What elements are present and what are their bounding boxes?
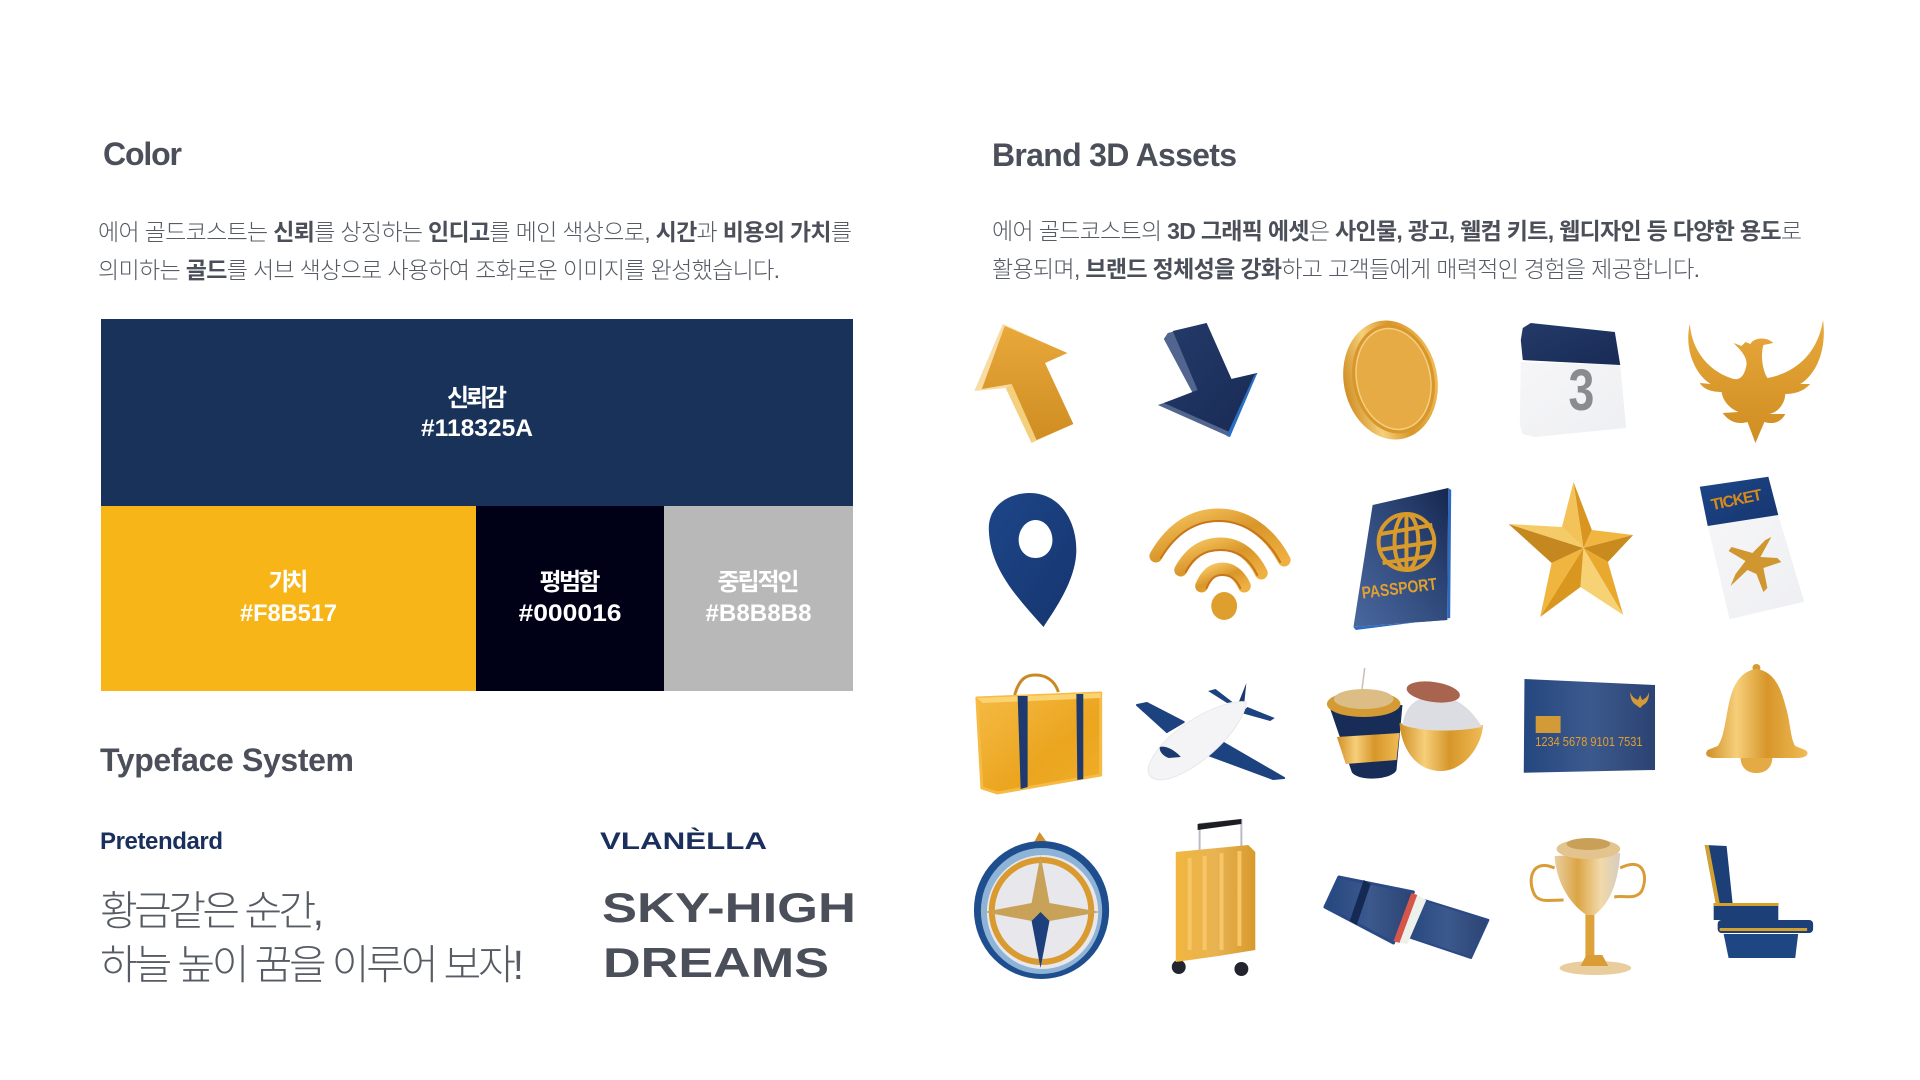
icon: passport — [1353, 488, 1451, 630]
icon: drink and food bowl — [1327, 668, 1483, 779]
swatch: black — [476, 506, 664, 691]
korean sample text: 황금같은 순간, — [100, 888, 324, 934]
swatch: gold — [101, 506, 476, 691]
assets description text — [992, 218, 1802, 282]
english sample text — [602, 884, 856, 986]
typeface label: pretendard: Pretendard — [100, 828, 223, 855]
icon: seat belt — [1325, 877, 1488, 958]
icon: credit card: 1234 5678 9101 7531 — [1535, 734, 1643, 749]
icon: calendar: 3 — [1569, 359, 1594, 423]
icon: airplane seat — [1705, 845, 1813, 958]
icon: wifi — [1156, 515, 1284, 620]
swatch: navy — [101, 319, 853, 506]
icon: compass — [974, 832, 1109, 979]
swatch: navy: #118325A — [421, 415, 533, 442]
color description text: 에어 골드코스트는 신뢰를 상징하는 인디고를 메인 색상으로, 시간과 비용의 가치를 — [98, 219, 852, 245]
icon: gold star — [1509, 482, 1633, 617]
swatch: gold: #F8B517 — [240, 600, 337, 627]
heading: brand 3d assets: Brand 3D Assets — [992, 137, 1237, 173]
icon: rolling suitcase — [1172, 819, 1255, 976]
color description text: 의미하는 골드를 서브 색상으로 사용하여 조화로운 이미지를 완성했습니다. — [98, 257, 780, 283]
icon: bell — [1706, 664, 1808, 773]
icon: briefcase — [977, 675, 1101, 793]
color description text — [98, 219, 852, 283]
swatch: black: 평범함 — [540, 569, 600, 596]
english sample text: SKY-HIGH — [602, 884, 856, 931]
swatch: gray: 중립적인 — [718, 569, 800, 596]
swatch: black: #000016 — [518, 600, 622, 627]
korean sample text — [100, 888, 524, 988]
assets description text: 에어 골드코스트의 3D 그래픽 에셋은 사인물, 광고, 웰컴 키트, 웹디자인 등 다양한 용도로 — [992, 218, 1802, 244]
icon: passport: PASSPORT — [1361, 574, 1438, 603]
icon: gold coin — [1332, 312, 1449, 448]
swatch: navy: 신뢰감 — [447, 385, 507, 412]
icon: airplane — [1137, 683, 1284, 780]
icon: ticket: TICKET — [1710, 487, 1764, 514]
icon grid — [974, 312, 1824, 979]
icon: ticket — [1700, 477, 1804, 619]
heading: color: Color — [103, 136, 182, 172]
english sample text: DREAMS — [603, 939, 829, 986]
assets description text: 활용되며, 브랜드 정체성을 강화하고 고객들에게 매력적인 경험을 제공합니다. — [992, 256, 1700, 282]
icon: calendar — [1520, 323, 1626, 437]
icon: credit card — [1524, 679, 1655, 773]
icon: location pin — [989, 493, 1076, 627]
heading: typeface system: Typeface System — [100, 742, 354, 778]
icon: trophy — [1531, 838, 1645, 975]
typeface label: vlanella: VLANÈLLA — [600, 827, 767, 855]
icon: down arrow — [1158, 323, 1257, 437]
korean sample text: 하늘 높이 꿈을 이루어 보자! — [100, 942, 524, 988]
swatch: gray — [664, 506, 853, 691]
swatch: gold: 가치 — [268, 569, 308, 596]
icon: up arrow — [974, 324, 1073, 443]
panel: typeface system — [100, 742, 856, 988]
swatch: gray: #B8B8B8 — [706, 600, 812, 627]
icon: phoenix emblem — [1688, 320, 1824, 443]
panel: brand 3d assets — [974, 137, 1824, 979]
panel: color — [98, 136, 853, 691]
